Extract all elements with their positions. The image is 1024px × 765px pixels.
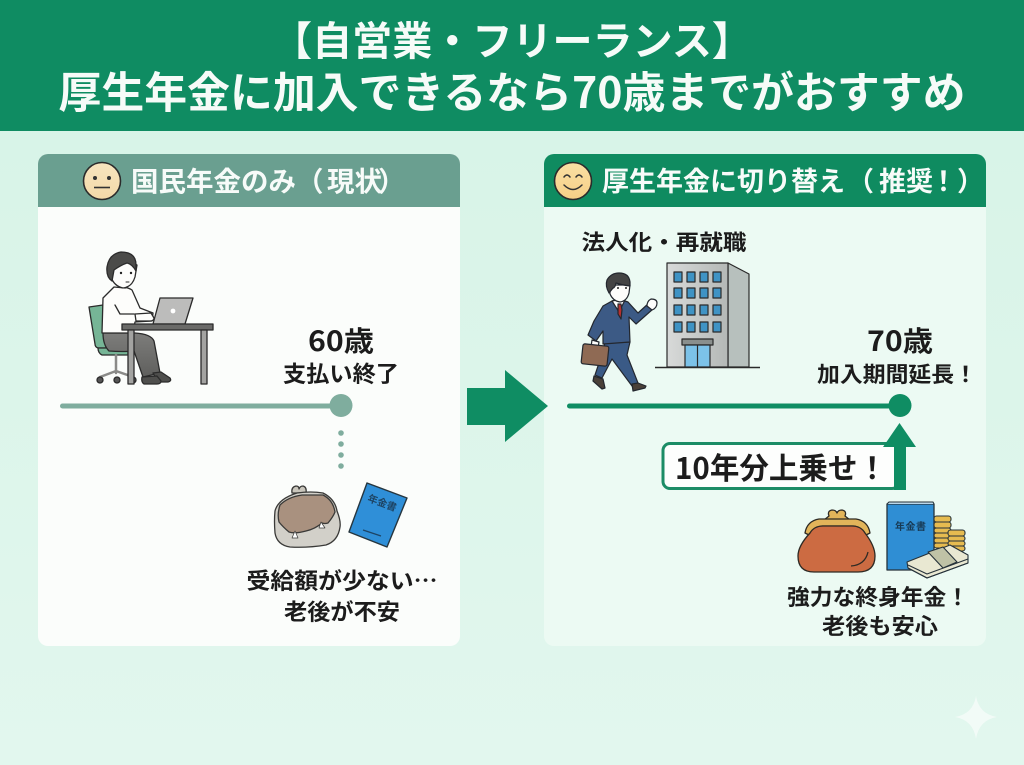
text: low benefits, anxious old age: 受給額が少ない… [246,564,438,596]
panel header: national pension [38,154,460,207]
label: age 70: 70歳 [867,320,933,360]
title banner [0,0,1024,131]
icon: blue pension book with coins and cash [887,502,968,578]
label: incorporate or re-employment: 法人化・再就職 [582,226,747,257]
desk [122,324,213,330]
arrow: up to age 70 [883,423,916,490]
icon: neutral face [84,162,120,200]
head [111,262,137,288]
heading: national pension only: 現状 [327,159,382,199]
heading: national pension only: ） [378,159,406,199]
chair [89,305,106,348]
panel header: employee pension [544,154,986,207]
laptop [153,298,193,324]
callout: 10 more years: 10年分上乗せ！ [675,444,887,488]
heading: national pension only: 国民年金のみ [131,159,296,199]
heading: switch to employee pension: （ [847,160,874,199]
icon: office building [655,263,760,368]
text: low benefits, anxious old age [246,564,438,627]
text: strong lifelong pension, secure old age: 老後も安心 [822,609,938,641]
heading: switch to employee pension: ！ [930,160,957,199]
heading: switch to employee pension: 厚生年金に切り替え [602,160,845,199]
icon: full coin purse [798,510,875,572]
label: enrollment period extended: 加入期間延長！ [817,358,977,389]
heading: switch to employee pension: 推奨 [879,160,933,199]
timeline: extended to 70 [567,394,912,417]
sweater [102,287,153,333]
legs and shoes [103,333,160,377]
text: strong lifelong pension, secure old age: 強力な終身年金！ [787,580,969,612]
icon: person working at laptop [89,252,213,384]
icon: blue pension book with coins and cash: 年金書 [895,518,926,533]
icon: smiling face [554,162,592,200]
icon: empty coin purse [274,486,340,547]
icon: blue pension book [349,483,407,547]
panel: current state (national pension only) [38,154,460,646]
icon: blue pension book: 年金書 [366,490,399,514]
heading: switch to employee pension: ） [957,160,984,199]
text: strong lifelong pension, secure old age [787,580,969,641]
text: low benefits, anxious old age: 老後が不安 [284,595,400,627]
label: age 60: 60歳 [308,320,374,360]
heading: national pension only: （ [296,159,324,199]
icon: sparkle watermark [955,696,997,739]
icon: businessman walking with briefcase [581,273,657,391]
panel: switch to employee pension (recommended) [544,154,986,646]
title banner: 厚生年金に加入できるなら70歳までがおすすめ [58,59,966,121]
arrow: transition to right panel [467,370,548,442]
title banner: 【自営業・フリーランス】 [272,9,752,67]
label: payment ends: 支払い終了 [283,357,399,389]
timeline: ends at 60 [60,394,352,469]
